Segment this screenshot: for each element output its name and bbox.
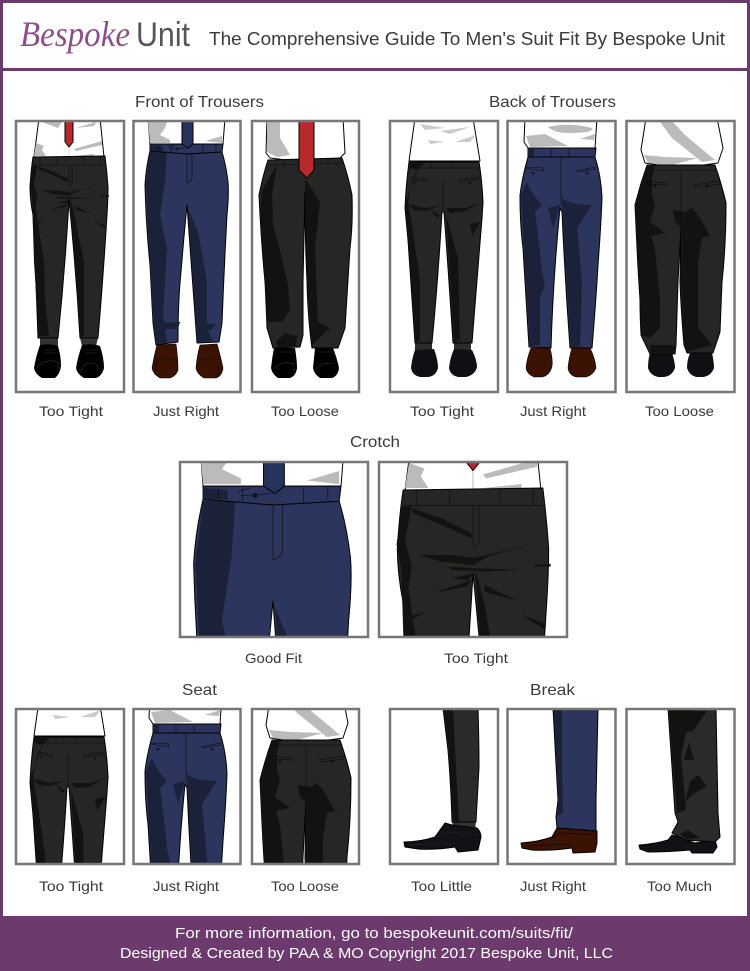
panel: crotch good fit (178, 460, 370, 638)
label: Too Little break: Too Little (411, 878, 472, 894)
panel: break just right (508, 708, 616, 864)
panel: back too tight (390, 118, 498, 392)
panel: seat too tight (14, 708, 126, 866)
panel: break too much (626, 708, 734, 864)
label: Just Right front: Just Right (153, 403, 219, 419)
label: Too Tight crotch: Too Tight (444, 650, 508, 666)
label: Too Tight seat: Too Tight (39, 878, 103, 894)
heading: Back of Trousers: Back of Trousers (489, 94, 616, 111)
panel: crotch too tight (378, 460, 568, 638)
panel: back too loose (626, 118, 734, 392)
heading: Seat: Seat (182, 682, 218, 699)
label: Good Fit: Good Fit (245, 650, 302, 666)
panel: front too tight (16, 118, 124, 392)
panel: front just right (134, 118, 240, 392)
logo: Bespoke Unit: Unit (136, 16, 190, 54)
panel: seat just right (132, 708, 242, 866)
panel: front too loose (252, 118, 359, 392)
label: Too Loose seat: Too Loose (271, 878, 339, 894)
footer: Designed & Created by PAA & MO Copyright 2017 Bespoke Unit, LLC (120, 945, 613, 962)
label: Too Loose front: Too Loose (271, 403, 339, 419)
label: Too Much break: Too Much (647, 878, 712, 894)
heading: Break: Break (530, 682, 576, 699)
label: Too Tight front: Too Tight (39, 403, 103, 419)
label: Too Tight back: Too Tight (410, 403, 474, 419)
footer: For more information, go to bespokeunit.com/suits/fit/ (175, 925, 574, 942)
footer (0, 916, 750, 971)
header (0, 14, 750, 71)
panel: break too little (390, 708, 498, 864)
heading: Front of Trousers: Front of Trousers (135, 94, 264, 111)
label: Too Loose back: Too Loose (645, 403, 714, 419)
label: Just Right back: Just Right (520, 403, 586, 419)
label: Just Right seat: Just Right (153, 878, 219, 894)
panel: seat too loose (250, 708, 360, 866)
label: Just Right break: Just Right (520, 878, 586, 894)
logo: Bespoke Unit: Bespoke (20, 14, 130, 54)
title: The Comprehensive Guide To Men's Suit Fit By Bespoke Unit (209, 28, 725, 49)
heading: Crotch: Crotch (350, 434, 400, 451)
panel: back just right (508, 118, 616, 392)
